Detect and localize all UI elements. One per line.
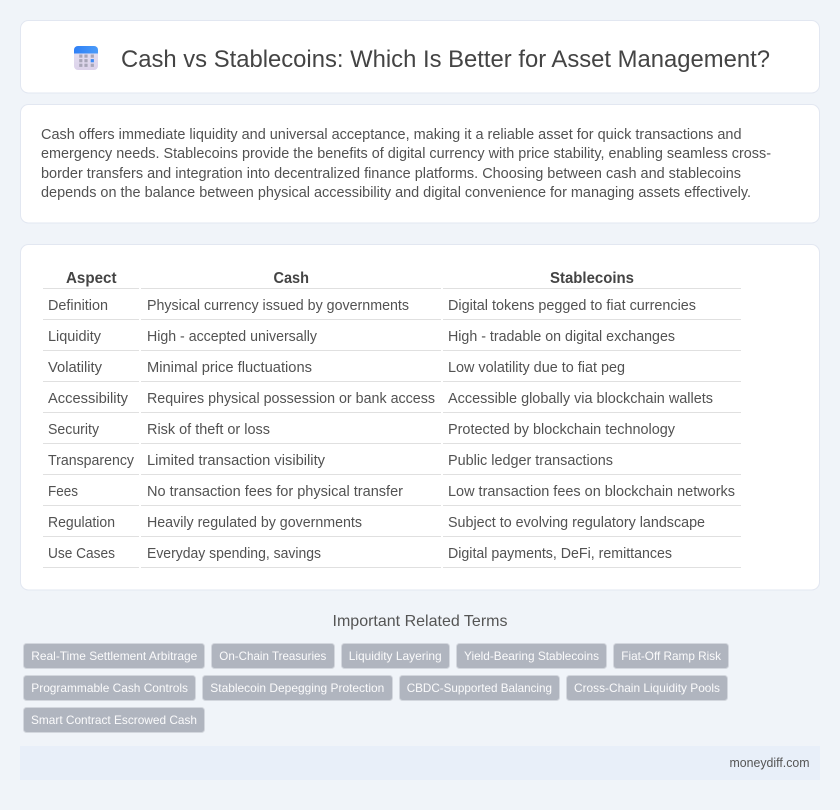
- row: security: Security: [48, 422, 100, 438]
- row: accessibility: [43, 391, 741, 413]
- row: fees: [43, 484, 741, 506]
- tag: Liquidity Layering: [349, 649, 442, 663]
- tag: Yield-Bearing Stablecoins: [464, 649, 599, 663]
- row: use cases: [43, 546, 741, 568]
- intro paragraph: depends on the balance between physical accessibility and digital convenience for managing assets effectively.: [41, 185, 751, 201]
- footer: [20, 746, 820, 780]
- row: regulation: Subject to evolving regulatory landscape: [448, 515, 705, 531]
- table header row: Aspect: [66, 270, 117, 287]
- row: fees: Low transaction fees on blockchain networks: [448, 484, 735, 500]
- panel: header: [20, 20, 820, 93]
- row: transparency: [43, 453, 741, 475]
- row: transparency: Transparency: [48, 453, 135, 469]
- tag: [212, 644, 334, 668]
- table header row: [43, 270, 741, 289]
- tag: [614, 644, 728, 668]
- panel: introduction: [20, 104, 820, 223]
- tag: [342, 644, 450, 668]
- row: volatility: [43, 360, 741, 382]
- tag: Stablecoin Depegging Protection: [210, 681, 384, 695]
- row: definition: Physical currency issued by governments: [147, 298, 409, 314]
- tag: On-Chain Treasuries: [219, 649, 326, 663]
- tag: Real-Time Settlement Arbitrage: [31, 649, 198, 663]
- row: liquidity: High - tradable on digital exchanges: [448, 329, 675, 345]
- row: regulation: [43, 515, 741, 537]
- intro paragraph: emergency needs. Stablecoins provide the benefits of digital currency with price stability, enabling seamless cross-: [41, 146, 771, 162]
- panel: comparison table: [20, 244, 820, 590]
- table header row: Stablecoins: [550, 270, 634, 287]
- row: accessibility: Accessibility: [48, 391, 129, 407]
- intro paragraph: Cash offers immediate liquidity and universal acceptance, making it a reliable asset for quick transactions and: [41, 127, 742, 143]
- tag: Cross-Chain Liquidity Pools: [574, 681, 720, 695]
- tag: [202, 676, 392, 700]
- row: volatility: Minimal price fluctuations: [147, 360, 312, 376]
- tag: [456, 644, 606, 668]
- tag: [566, 676, 728, 700]
- row: use cases: Use Cases: [48, 546, 115, 562]
- intro paragraph: border transfers and integration into decentralized finance platforms. Choosing between cash and stablecoins: [41, 166, 741, 182]
- icon: calendar: [74, 46, 98, 70]
- row: fees: No transaction fees for physical transfer: [147, 484, 403, 500]
- row: regulation: Heavily regulated by governments: [147, 515, 362, 531]
- tag: CBDC-Supported Balancing: [407, 681, 552, 695]
- row: transparency: Limited transaction visibility: [147, 453, 326, 469]
- row: volatility: Low volatility due to fiat peg: [448, 360, 625, 376]
- row: accessibility: Accessible globally via blockchain wallets: [448, 391, 713, 407]
- tag: Smart Contract Escrowed Cash: [31, 713, 197, 727]
- row: definition: [43, 298, 741, 320]
- row: liquidity: [43, 329, 741, 351]
- related terms tags: [24, 644, 728, 732]
- tag: Fiat-Off Ramp Risk: [621, 649, 722, 663]
- row: accessibility: Requires physical possession or bank access: [147, 391, 435, 407]
- table header row: Cash: [274, 270, 309, 287]
- row: security: Risk of theft or loss: [147, 422, 270, 438]
- row: transparency: Public ledger transactions: [448, 453, 613, 469]
- row: security: Protected by blockchain technology: [448, 422, 676, 438]
- row: regulation: Regulation: [48, 515, 115, 531]
- row: volatility: Volatility: [48, 360, 103, 376]
- tag: Programmable Cash Controls: [31, 681, 188, 695]
- title: Cash vs Stablecoins: Which Is Better for Asset Management?: [121, 46, 770, 73]
- intro paragraph: [41, 127, 771, 201]
- row: definition: Digital tokens pegged to fiat currencies: [448, 298, 696, 314]
- heading: related terms: Important Related Terms: [332, 613, 508, 630]
- footer source text: moneydiff.com: [730, 755, 810, 770]
- tag: [24, 676, 196, 700]
- row: definition: Definition: [48, 298, 108, 314]
- row: use cases: Digital payments, DeFi, remittances: [448, 546, 672, 562]
- row: liquidity: Liquidity: [48, 329, 102, 345]
- tag: [24, 644, 204, 668]
- tag: [400, 676, 560, 700]
- row: liquidity: High - accepted universally: [147, 329, 318, 345]
- tag: [24, 708, 204, 732]
- row: security: [43, 422, 741, 444]
- row: use cases: Everyday spending, savings: [147, 546, 321, 562]
- row: fees: Fees: [48, 484, 78, 500]
